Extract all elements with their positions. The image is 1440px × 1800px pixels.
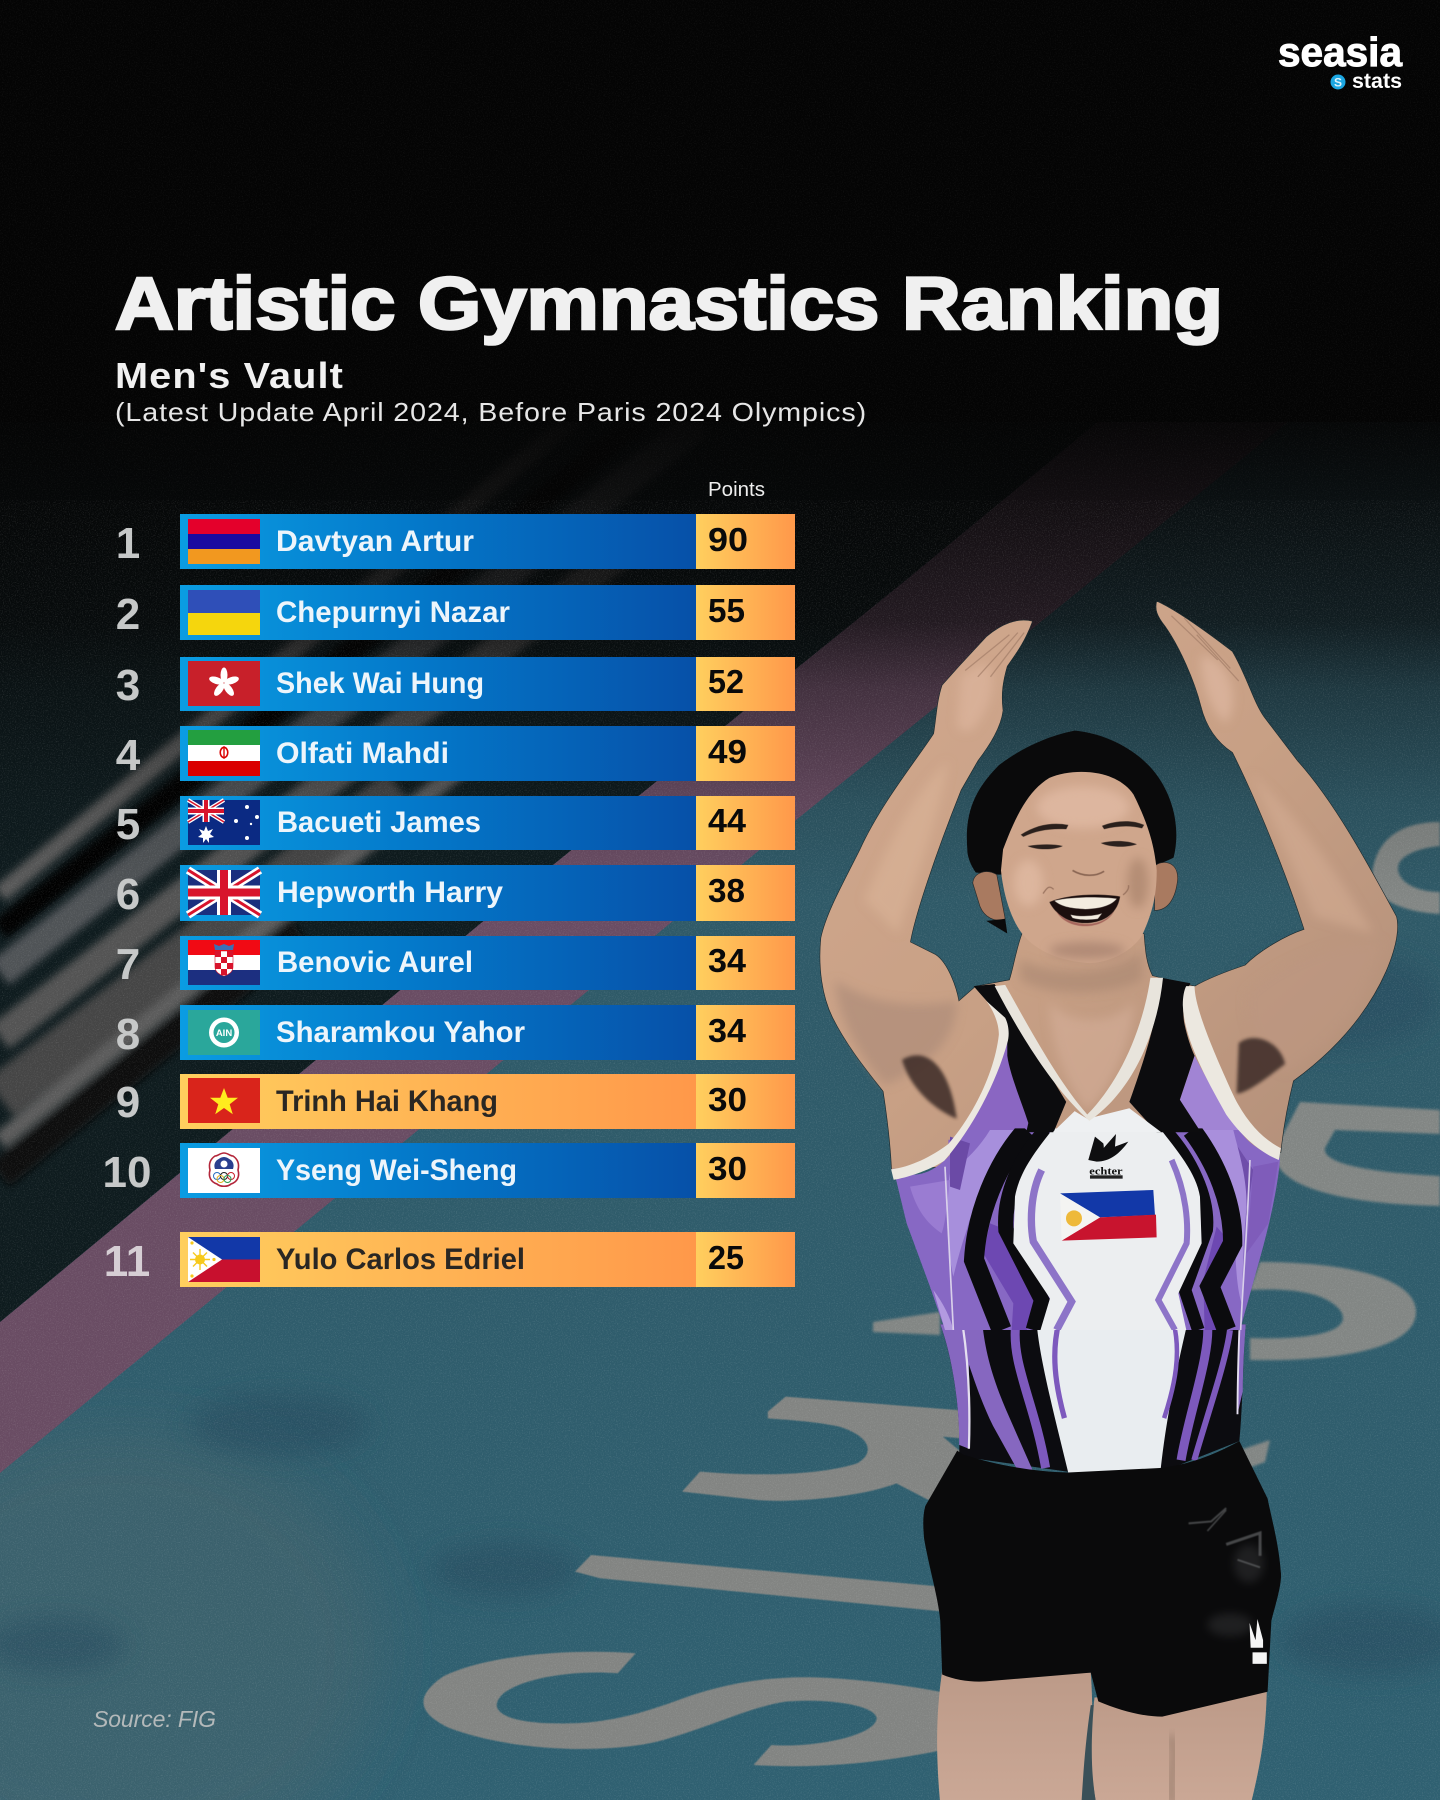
- rank 2 row: 55: [708, 592, 745, 629]
- head: [967, 731, 1178, 963]
- rank 9 row: [116, 1074, 795, 1129]
- rank 7 row: 7: [116, 940, 140, 989]
- rank 9 row: 9: [116, 1078, 140, 1127]
- black shoulder straps: [974, 984, 1066, 1132]
- dark gym area: [0, 420, 1100, 1322]
- rank 4 row: 4: [116, 731, 141, 780]
- floor letters: right side: [873, 822, 1440, 1475]
- source note: Source: FIG: [93, 1706, 216, 1732]
- rank 4 row: Olfati Mahdi: [276, 737, 449, 770]
- white front upper: [1053, 1108, 1161, 1132]
- hair back: [967, 731, 1176, 875]
- rank 10 row: [103, 1143, 795, 1198]
- chest brand and flag: [1060, 1134, 1157, 1241]
- rank 8 row: 8: [116, 1010, 140, 1059]
- flag: Australia: [188, 800, 260, 845]
- shoulder purple panels: [948, 1039, 1033, 1146]
- rank 3 row: 52: [708, 663, 744, 700]
- flag: United Kingdom: [188, 870, 260, 915]
- rank 1 row: 1: [116, 519, 140, 568]
- rank 5 row: 44: [708, 802, 747, 839]
- flag: Chinese Taipei: [188, 1148, 260, 1193]
- violet under stripes: [984, 1224, 1034, 1330]
- ears: [973, 862, 1178, 920]
- rank 11 row: 25: [708, 1239, 744, 1276]
- top fade: [0, 420, 1440, 900]
- rank 9 row: 30: [708, 1081, 747, 1118]
- rank 5 row: [116, 796, 795, 850]
- rank 6 row: 6: [116, 870, 140, 919]
- rank 7 row: [116, 936, 795, 990]
- update note: (Latest Update April 2024, Before Paris 2024 Olympics): [115, 397, 867, 427]
- flag: Armenia: [188, 519, 260, 564]
- flag: Hong Kong: [188, 661, 260, 706]
- flag: Ukraine: [188, 590, 260, 635]
- brand wordmark: echter: [1089, 1166, 1123, 1177]
- rank 8 row: Sharamkou Yahor: [276, 1016, 525, 1049]
- eyes: [1027, 844, 1063, 849]
- rank 6 row: Hepworth Harry: [277, 876, 503, 909]
- title: Artistic Gymnastics Ranking: [115, 262, 1223, 345]
- rank 11 row: 11: [104, 1237, 150, 1286]
- flag: AIN neutral athletes: AIN: [216, 1028, 232, 1039]
- lavender inner lines: [1031, 1160, 1187, 1330]
- rank 1 row: [116, 514, 795, 569]
- gym stripes: [0, 363, 700, 1175]
- rank 2 row: 2: [116, 590, 140, 639]
- rank 2 row: [116, 585, 795, 640]
- rank 1 row: 90: [708, 521, 748, 558]
- eyebrows: [1021, 824, 1068, 837]
- leotard waist: [940, 1322, 1246, 1472]
- rank 3 row: Shek Wai Hung: [276, 667, 484, 700]
- purple lighter patches: [947, 1130, 1017, 1277]
- white neckline: [995, 978, 1163, 1121]
- leotard chest: [893, 1128, 1280, 1332]
- chalk marks: [1189, 1508, 1260, 1567]
- logo: seasia stats: seasia: [1278, 29, 1403, 75]
- white arm trims: [891, 1001, 1009, 1180]
- pink track band: [0, 420, 1290, 1473]
- floor grey tint: [0, 1430, 380, 1800]
- film grain: [0, 0, 1440, 500]
- rank 2 row: Chepurnyi Nazar: [276, 596, 510, 629]
- face: [1001, 772, 1157, 963]
- shorts: [923, 1441, 1281, 1717]
- floor letters: centre: [423, 1397, 979, 1766]
- rank 4 row: 49: [708, 733, 747, 770]
- rank 8 row: [116, 1005, 795, 1060]
- rank 1 row: Davtyan Artur: [276, 525, 474, 558]
- rank 6 row: 38: [708, 872, 745, 909]
- underarm hair: [902, 1038, 1285, 1119]
- icon: shorts logo: [1250, 1619, 1267, 1664]
- subtitle: Men's Vault: [115, 355, 344, 396]
- flag: Vietnam: [188, 1078, 260, 1123]
- leotard straps and trims: [891, 978, 1281, 1180]
- black stripes: [974, 1130, 1233, 1330]
- rank 9 row: Trinh Hai Khang: [276, 1085, 498, 1118]
- gymnast figure: [820, 601, 1398, 1800]
- points column header: Points: [708, 479, 765, 501]
- white front waist: [1037, 1326, 1187, 1472]
- flag: Iran: [188, 730, 260, 776]
- rank 3 row: [116, 657, 795, 711]
- rank 10 row: 30: [708, 1150, 747, 1187]
- floor shading blotches: [0, 950, 1440, 1676]
- flag: Philippines: [188, 1237, 260, 1282]
- icon: brand wings: [1088, 1134, 1128, 1162]
- rank 4 row: [116, 726, 795, 781]
- rank 8 row: 34: [708, 1012, 747, 1049]
- rank 7 row: 34: [708, 942, 747, 979]
- nose: [1073, 870, 1104, 875]
- mouth: [1049, 895, 1120, 923]
- rank 11 row: Yulo Carlos Edriel: [276, 1243, 525, 1276]
- finger lines: [965, 616, 1239, 681]
- torso and arms: [820, 601, 1398, 1169]
- rank 10 row: 10: [103, 1148, 151, 1197]
- flag: Croatia: [188, 940, 260, 985]
- rank 7 row: Benovic Aurel: [277, 946, 473, 979]
- waist side purple: [940, 1324, 1032, 1470]
- legs: [937, 1671, 1267, 1800]
- rank 5 row: 5: [116, 800, 140, 849]
- white centre panel: [1013, 1128, 1202, 1332]
- rank 10 row: Yseng Wei-Sheng: [276, 1154, 517, 1187]
- violet trims waist: [1015, 1322, 1230, 1468]
- arm shading: [835, 656, 1382, 1110]
- logo: seasia stats: stats: [1352, 70, 1402, 93]
- chest flag: [1060, 1190, 1157, 1241]
- flag: AIN neutral athletes: [188, 1010, 260, 1055]
- icon: logo dot: S: [1334, 76, 1342, 90]
- rank 3 row: 3: [116, 661, 140, 710]
- rank 11 row: [104, 1232, 795, 1287]
- rank 5 row: Bacueti James: [277, 806, 481, 839]
- rank 6 row: [116, 865, 795, 921]
